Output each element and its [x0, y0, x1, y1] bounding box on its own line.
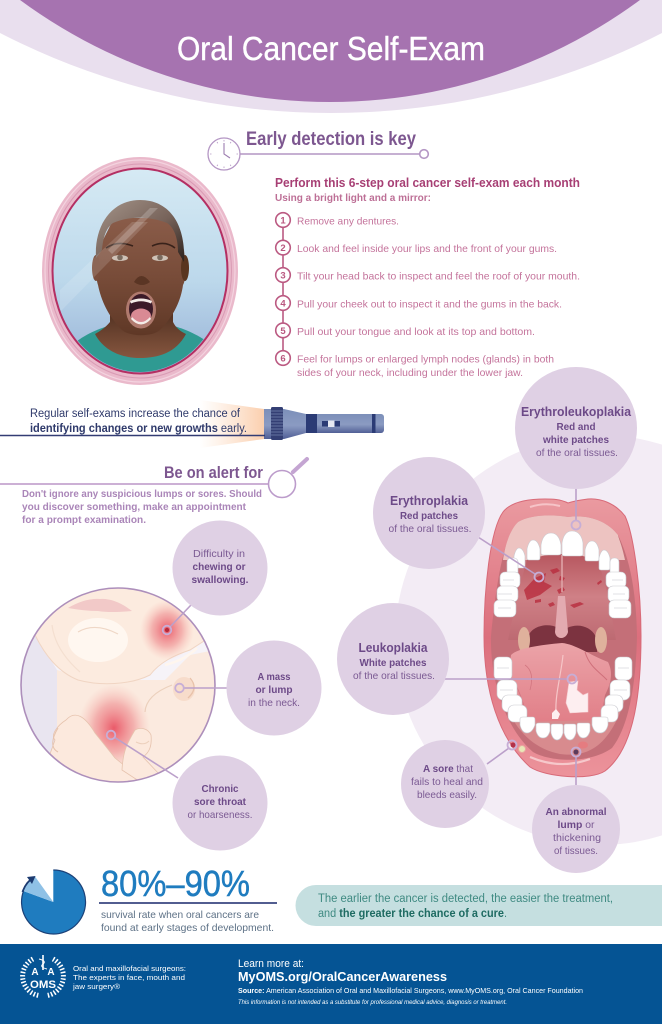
alert paragraph: Don't ignore any suspicious lumps or sores. Should — [22, 488, 262, 500]
callout: erythroplakia — [373, 457, 485, 569]
flashlight message — [0, 408, 265, 436]
heading: be on alert: Be on alert for — [164, 464, 264, 482]
tagline — [72, 964, 186, 991]
callout: erythroleukoplakia: Erythroleukoplakia — [521, 404, 632, 419]
callout: sore throat: Chronic — [202, 783, 239, 795]
statistic: 80-90 percent — [99, 863, 277, 934]
flashlight message: Regular self-exams increase the chance of — [30, 408, 241, 420]
callout: mass in neck: A mass — [258, 671, 291, 683]
illustration: neck and jaw — [20, 587, 216, 783]
background circle behind mouth — [395, 435, 662, 845]
callout: erythroleukoplakia: white patches — [542, 434, 609, 446]
callout: leukoplakia: White patches — [360, 657, 427, 669]
callout: abnormal lump — [532, 785, 620, 873]
sub: floor of mouth — [498, 680, 628, 755]
numbered steps list: sides of your neck, including under the lower jaw. — [297, 367, 523, 379]
chart: survival pie — [21, 870, 86, 934]
numbered steps list: 1 — [280, 216, 286, 226]
instructions heading: Perform this 6-step oral cancer self-exam each month — [275, 176, 580, 190]
alert paragraph — [22, 488, 262, 526]
callout: erythroleukoplakia — [515, 367, 637, 489]
callout: leukoplakia — [337, 603, 449, 715]
icon: flashlight with beam — [200, 400, 384, 448]
callout: mass in neck — [226, 640, 322, 736]
sub: lower teeth — [494, 657, 632, 740]
tagline: Oral and maxillofacial surgeons: — [73, 964, 186, 973]
numbered steps list: Feel for lumps or enlarged lymph nodes (glands) in both — [297, 354, 554, 366]
footer band — [0, 944, 662, 1024]
numbered steps list: Look and feel inside your lips and the front of your gums. — [297, 243, 557, 255]
callout: sore — [401, 740, 489, 828]
callout: erythroplakia: Red patches — [400, 510, 458, 522]
callout: erythroleukoplakia: of the oral tissues. — [536, 447, 618, 459]
callouts: oral lesions — [337, 367, 637, 873]
instructions heading: Using a bright light and a mirror: — [275, 192, 431, 204]
sub: red patches on palate — [524, 568, 602, 608]
statistic: 80-90 percent: 80%–90% — [101, 863, 250, 904]
numbered steps list: 3 — [280, 270, 286, 282]
callout: earlier detection: and the greater the chance of a cure. — [318, 908, 507, 920]
logo: AAOMS: A — [31, 967, 39, 978]
learn more block: MyOMS.org/OralCancerAwareness — [238, 969, 447, 984]
callout: erythroplakia: of the oral tissues. — [388, 523, 472, 535]
numbered steps list: Tilt your head back to inspect and feel the roof of your mouth. — [297, 270, 580, 282]
learn more block — [238, 958, 583, 1006]
numbered steps list: Pull your cheek out to inspect it and the gums in the back. — [297, 298, 562, 310]
callout: sore: fails to heal and — [411, 776, 483, 788]
statistic: 80-90 percent: survival rate when oral cancers are — [101, 909, 259, 921]
instructions heading — [275, 176, 580, 204]
callout: difficulty chewing — [172, 520, 268, 616]
tagline: jaw surgery® — [72, 982, 121, 991]
logo: AAOMS: OMS — [30, 979, 56, 991]
icon: magnifying glass — [268, 459, 307, 498]
callout: difficulty chewing: Difficulty in — [193, 548, 245, 560]
heading: early detection: Early detection is key — [246, 129, 416, 150]
callout: abnormal lump: thickening — [553, 832, 601, 844]
title: Oral Cancer Self-Exam — [177, 30, 485, 67]
numbered steps list — [276, 213, 580, 379]
callout: sore throat: sore throat — [194, 796, 246, 808]
callouts: symptoms — [107, 520, 322, 850]
learn more block: Source: American Association of Oral and Maxillofacial Surgeons, www.MyOMS.org, Oral Cancer Foundation — [238, 986, 583, 995]
callout: sore throat: or hoarseness. — [188, 809, 252, 821]
learn more block: This information is not intended as a substitute for professional medical advice, diagnosis or treatment. — [238, 1000, 507, 1006]
illustration: open mouth — [484, 499, 641, 777]
callout: abnormal lump: lump or — [558, 819, 595, 831]
numbered steps list: Pull out your tongue and look at its top and bottom. — [297, 326, 535, 338]
sub: white patches — [566, 681, 588, 713]
numbered steps list: Remove any dentures. — [297, 216, 399, 228]
callout: earlier detection: The earlier the cancer is detected, the easier the treatment, — [318, 893, 613, 905]
logo: AAOMS — [23, 955, 63, 996]
callout: sore: bleeds easily. — [417, 789, 477, 801]
callout: mass in neck: or lump — [256, 684, 292, 696]
callout: leukoplakia: Leukoplakia — [358, 640, 428, 655]
numbered steps list: 6 — [280, 354, 286, 364]
callout: earlier detection — [296, 885, 662, 926]
callout: erythroleukoplakia: Red and — [556, 421, 596, 433]
callout: difficulty chewing: swallowing. — [192, 574, 249, 586]
icon: clock with heading rule — [208, 138, 428, 170]
callout: erythroplakia: Erythroplakia — [390, 493, 469, 508]
callout: abnormal lump: An abnormal — [546, 806, 607, 818]
callout: sore throat — [172, 756, 268, 850]
sub: lesions on lower lip — [518, 746, 526, 752]
tagline: The experts in face, mouth and — [73, 973, 185, 982]
numbered steps list: 2 — [280, 243, 286, 254]
flashlight message: identifying changes or new growths early. — [30, 423, 247, 435]
callout: leukoplakia: of the oral tissues. — [353, 670, 435, 682]
numbered steps list: 5 — [280, 326, 286, 337]
statistic: 80-90 percent: found at early stages of development. — [101, 922, 274, 934]
illustration: person in mirror — [42, 157, 238, 385]
alert paragraph: you discover something, make an appointment — [22, 501, 246, 513]
callout: mass in neck: in the neck. — [248, 697, 300, 709]
alert paragraph: for a prompt examination. — [22, 514, 146, 526]
sub: tongue — [510, 643, 611, 722]
learn more block: Learn more at: — [238, 958, 304, 970]
callout: abnormal lump: of tissues. — [554, 845, 598, 857]
numbered steps list: 4 — [280, 298, 286, 310]
callout: difficulty chewing: chewing or — [192, 561, 246, 573]
sub: upper teeth — [494, 531, 631, 618]
logo: AAOMS: A — [47, 967, 55, 978]
callout: sore: A sore that — [423, 763, 473, 775]
